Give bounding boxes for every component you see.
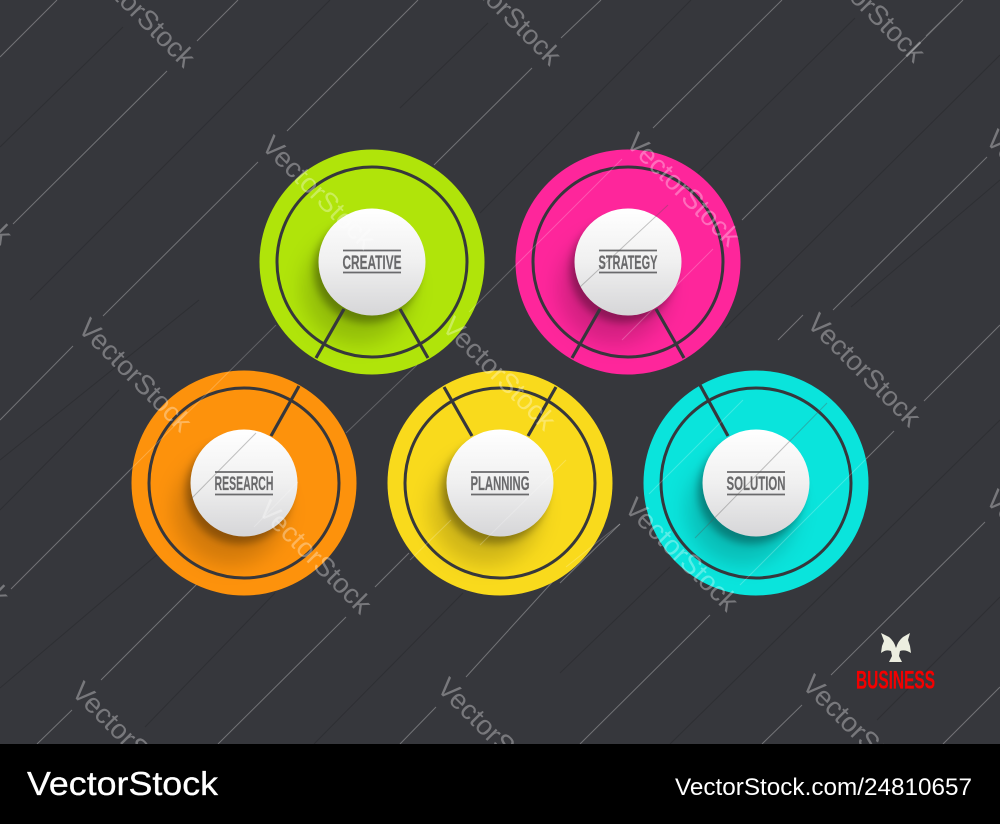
panel: solution: SOLUTION (726, 473, 786, 495)
panel: creative (260, 150, 484, 374)
watermarks: VectorStock (256, 129, 382, 255)
panel: strategy: STRATEGY (598, 252, 658, 274)
watermarks: VectorStock (66, 675, 192, 801)
panel: planning (388, 370, 612, 596)
watermarks: VectorStock (801, 307, 927, 433)
watermarks: VectorStock (252, 494, 378, 620)
watermarks: VectorStock (436, 310, 562, 436)
watermarks: VectorStock (796, 668, 922, 794)
watermarks: VectorStock (431, 671, 557, 797)
watermarks: VectorStock (72, 312, 198, 438)
panel: creative: CREATIVE (342, 252, 402, 274)
panel: research (132, 370, 356, 596)
logo wordmark: BUSINESS (856, 666, 935, 694)
panel: strategy (516, 150, 740, 374)
logo icon (881, 633, 911, 662)
panel: planning: PLANNING (470, 473, 530, 495)
watermarks: VectorStock (620, 126, 746, 252)
watermarks: VectorStock (619, 491, 745, 617)
panel: solution (644, 370, 868, 596)
footer bar (0, 744, 1000, 824)
footer bar: VectorStock.com/24810657 (675, 774, 972, 801)
footer bar: VectorStock (27, 766, 218, 803)
panel: research: RESEARCH (214, 473, 274, 495)
